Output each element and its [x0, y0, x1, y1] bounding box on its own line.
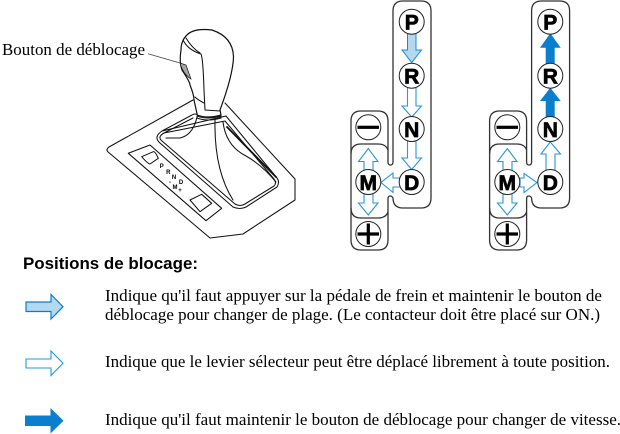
legend text 1: Indique qu'il faut appuyer sur la pédale de frein et maintenir le bouton de [105, 286, 602, 305]
heading: Positions de blocage: [23, 255, 198, 273]
selector diagram: left: D [404, 172, 419, 195]
bezel [157, 114, 278, 208]
gear positions: - [169, 180, 171, 186]
shift boot [166, 117, 276, 200]
gear positions: R [166, 170, 171, 176]
positions [538, 9, 563, 34]
console outline [107, 100, 295, 238]
legend text 2: Indique que le levier sélecteur peut être déplacé librement à toute position. [105, 352, 610, 371]
selector diagram: left: N [404, 119, 419, 142]
selector diagram: right: N [543, 119, 558, 142]
positions [399, 9, 424, 34]
legend text 3: Indique qu'il faut maintenir le bouton de déblocage pour changer de vitesse. [105, 410, 620, 429]
selector diagram: right: D [543, 172, 558, 195]
gate outline [490, 1, 570, 250]
selector diagram: right: R [543, 66, 558, 88]
gear positions: + [178, 188, 182, 194]
unlock button [180, 63, 191, 79]
legend text 1 [105, 286, 602, 324]
label: bouton de déblocage: Bouton de déblocage [2, 40, 145, 59]
legend arrow: light blue [26, 294, 63, 319]
leader line [148, 54, 180, 63]
legend arrow: solid blue [25, 408, 64, 434]
legend text 1: déblocage pour changer de plage. (Le contacteur doit être placé sur ON.) [105, 305, 600, 324]
knob trim [183, 38, 220, 111]
arrows [402, 33, 422, 62]
gear positions: P [160, 164, 164, 170]
selector diagram: right [490, 1, 570, 250]
knob [180, 30, 234, 117]
selector diagram: left: P [405, 12, 419, 34]
selector diagram: right: P [543, 12, 557, 34]
gear positions: D [179, 180, 184, 186]
arrows [540, 33, 561, 64]
gate outline [351, 1, 431, 250]
illustration: gear shifter [107, 30, 295, 238]
plate buttons [142, 152, 212, 212]
gear positions [160, 164, 184, 194]
legend arrow: hollow [26, 351, 63, 376]
selector diagram: left: R [404, 66, 419, 88]
gear positions: M [172, 185, 178, 191]
selector diagram: left: M [360, 172, 377, 195]
indicator plate [128, 145, 222, 221]
gear positions: N [172, 175, 176, 181]
selector diagram: left [351, 1, 431, 250]
selector diagram: right: M [499, 172, 516, 195]
